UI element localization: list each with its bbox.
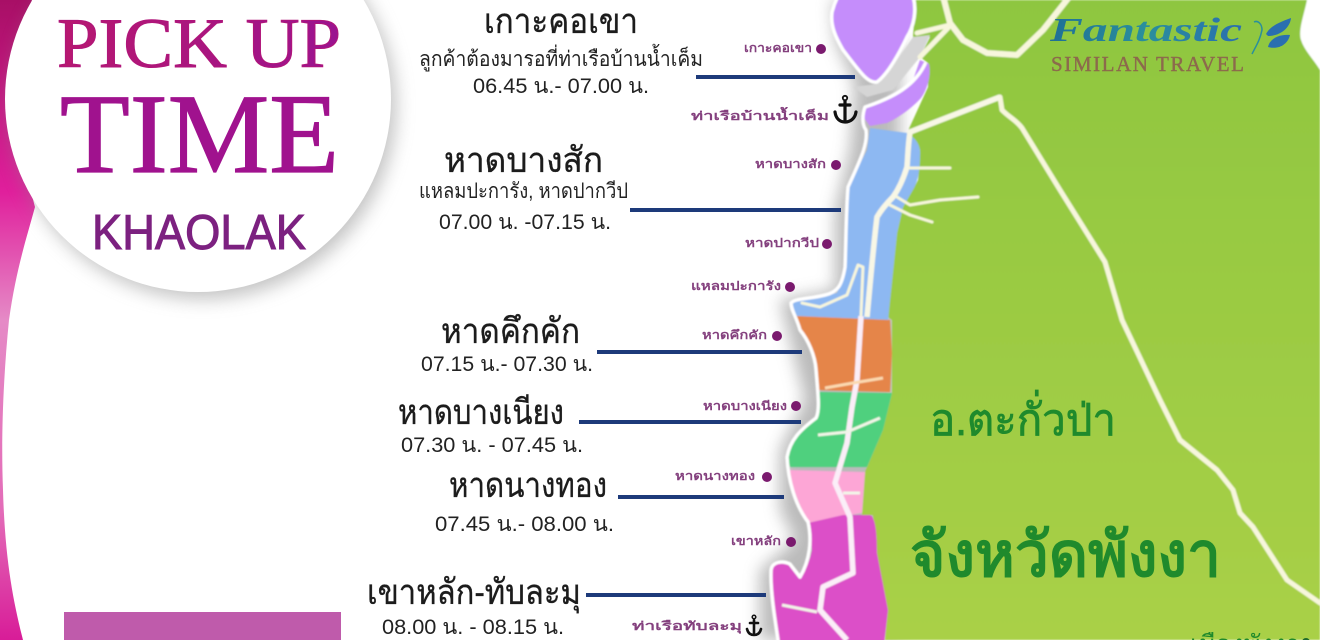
stop 4: bang niang: 07.30 น. - 07.45 น.	[401, 434, 583, 457]
map place labels: หาดปากวีป	[745, 236, 819, 250]
water gap	[853, 35, 930, 97]
map place labels	[632, 41, 841, 634]
logo: fantastic similan travel: Fantastic	[1049, 12, 1242, 49]
stop 4: bang niang	[398, 393, 801, 457]
left magenta swoosh	[0, 0, 35, 640]
stop 1: koh kho khao: 06.45 น.- 07.00 น.	[473, 75, 649, 98]
map place labels: หาดบางเนียง	[703, 399, 787, 413]
stop 2: bang sak: หาดบางสัก	[444, 141, 603, 180]
province label: จังหวัดพังงา	[910, 522, 1221, 590]
logo: fantastic similan travel: SIMILAN TRAVEL	[1051, 52, 1244, 76]
zone: bang niang	[787, 392, 892, 467]
map place labels: เขาหลัก	[731, 534, 781, 548]
roads	[782, 0, 1320, 640]
stop 2: bang sak: 07.00 น. -07.15 น.	[439, 211, 611, 234]
stop 1: koh kho khao: ลูกค้าต้องมารอที่ท่าเรือบ้านน้ำเค็ม	[419, 44, 703, 72]
logo: fantastic similan travel	[1049, 12, 1291, 76]
coastline	[771, 64, 925, 640]
heading: time: TIME	[60, 72, 339, 197]
zone: khuk khak	[796, 316, 892, 392]
map place labels: หาดคึกคัก	[702, 328, 767, 342]
stop 2: bang sak	[419, 141, 841, 234]
stop 3: khuk khak	[421, 312, 802, 376]
stop 6: khao lak thap lamu: เขาหลัก-ทับละมุ	[367, 573, 581, 613]
map	[770, 0, 1320, 640]
zone: khao lak thap lamu	[770, 515, 888, 640]
map place labels: ท่าเรือทับละมุ	[632, 619, 742, 634]
icon: leaves	[1252, 18, 1291, 54]
zone: ban nam khem	[864, 60, 930, 126]
icon: anchor ban nam khem	[835, 96, 856, 122]
district label: อ.ตะกั่วป่า	[930, 389, 1116, 445]
stop 6: khao lak thap lamu	[367, 573, 766, 639]
icon: anchor thap lamu	[747, 615, 761, 635]
zone: koh kho khao	[832, 0, 915, 82]
map place labels: เกาะคอเขา	[744, 41, 812, 55]
stop 2: bang sak: แหลมปะการัง, หาดปากวีป	[419, 180, 628, 203]
land: green province	[862, 0, 1320, 640]
stop 1: koh kho khao: เกาะคอเขา	[484, 2, 638, 41]
coast shadow	[760, 0, 900, 640]
bottom purple bar	[64, 612, 341, 640]
stop 3: khuk khak: หาดคึกคัก	[441, 312, 580, 351]
stop 3: khuk khak: 07.15 น.- 07.30 น.	[421, 353, 593, 376]
stop 5: nang thong: หาดนางทอง	[449, 466, 607, 505]
stop 5: nang thong	[435, 466, 784, 536]
map place labels: ท่าเรือบ้านน้ำเค็ม	[691, 106, 829, 123]
stop 6: khao lak thap lamu: 08.00 น. - 08.15 น.	[382, 616, 564, 639]
stop 5: nang thong: 07.45 น.- 08.00 น.	[435, 513, 614, 536]
map place labels: แหลมปะการัง	[691, 279, 781, 293]
heading: khaolak: KHAOLAK	[92, 206, 306, 260]
pick up time badge	[5, 0, 396, 299]
map place labels: หาดนางทอง	[675, 469, 755, 483]
map place labels: หาดบางสัก	[755, 157, 826, 171]
stop 1: koh kho khao	[419, 2, 855, 98]
zone: nang thong	[790, 470, 865, 523]
heading: pick up: PICK UP	[57, 5, 341, 83]
white patch top right	[1300, 0, 1320, 70]
zone: bang sak	[792, 128, 920, 320]
stop 4: bang niang: หาดบางเนียง	[398, 393, 564, 432]
